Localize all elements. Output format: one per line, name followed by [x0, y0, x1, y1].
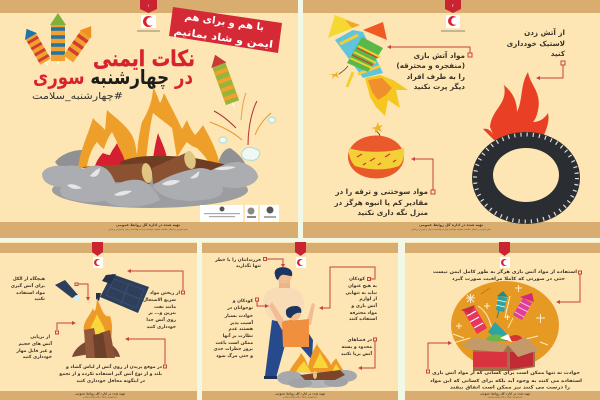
text: bomb: مقادیر کم یا انبوه هرگز در	[333, 198, 428, 207]
text: alcohol: برای آتش گیری	[11, 282, 45, 289]
footer	[75, 392, 125, 398]
panel 1: cover	[0, 0, 298, 238]
text: vulnerable: و حتی مرگ شود	[216, 352, 253, 359]
text: vulnerable: کودکان و	[232, 298, 253, 304]
text: clothes: در اینگونه محافل خودداری کنید	[76, 377, 146, 384]
flames	[78, 87, 220, 168]
text: fireworks use: نباید به تنهایی	[346, 291, 377, 296]
callout: closed spaces	[361, 338, 376, 368]
text: size: خودداری کنید	[23, 354, 52, 360]
footer	[411, 223, 491, 231]
text: alcohol: مواد استفاده	[16, 291, 45, 296]
text: accidents: حوادث نه تنها ممکن است برای کسانی که از مواد آتش بازی	[432, 370, 580, 376]
footer	[480, 392, 530, 398]
text: fireworks	[396, 50, 465, 91]
ribbon number: ۱	[147, 3, 150, 8]
icon: tire	[472, 132, 580, 224]
ribbon number	[295, 242, 306, 256]
stones	[42, 162, 258, 207]
logs	[82, 150, 228, 184]
text: closed spaces: در فضاهای	[348, 338, 373, 343]
text: tire warning: از آتش زدن	[524, 27, 565, 37]
text: vulnerable: هستند عدم	[228, 327, 253, 332]
icon: red crescent logo	[441, 15, 465, 32]
text: vulnerable: بروز خطرات جدی	[214, 347, 253, 352]
text: vulnerable	[214, 298, 253, 359]
banner: together: ایمن و شاد بمانیم	[173, 26, 274, 51]
text: fireworks use: از لوازم	[359, 297, 377, 302]
text: fuel: بنزین و... بر	[147, 311, 176, 316]
footer	[275, 392, 325, 398]
text: fireworks: ‏(منفجره و محترقه)‏	[396, 61, 465, 70]
text: alcohol: هیچگاه از الکل	[13, 275, 45, 282]
callout: vulnerable	[256, 298, 266, 306]
panel 3: fire and fuel	[0, 242, 197, 400]
ribbon number	[92, 242, 103, 256]
text: tire warning	[507, 27, 566, 58]
icon: rockets	[328, 15, 408, 116]
callout: fuel	[130, 271, 184, 294]
text: closed spaces: محدود و بسته	[341, 345, 372, 350]
text: fireworks use	[346, 276, 377, 322]
footer: دفتر آموزش و ارتقای سلامت معاونت بهداشت	[83, 396, 117, 398]
text: vulnerable: ممکن است باعث	[215, 340, 253, 346]
text: clothes: در موقع پریدن از روی آتش از لباس گشاد و	[65, 363, 163, 370]
text: never fully safe: استفاده از مواد آتش بازی هرگز به طور کامل ایمن نیست	[433, 268, 578, 275]
text: alcohol: نکنید	[34, 296, 45, 302]
footer: دفتر آموزش و ارتقای سلامت معاونت بهداشت وزارت بهداشت درمان و آموزش پزشکی	[108, 228, 188, 231]
icon: campfire	[72, 298, 120, 358]
icon: bottle	[55, 280, 80, 301]
firecracker: right	[208, 52, 242, 111]
text: size: و غیر قابل مهار	[15, 349, 52, 354]
stones base	[52, 172, 248, 208]
rockets	[461, 291, 534, 342]
text: fuel: روی آتش جدا	[146, 317, 176, 323]
text: bomb: مواد سوختنی و ترقه را در	[334, 187, 428, 196]
callout: tire	[539, 61, 565, 78]
callout: safety	[559, 271, 582, 302]
text: vulnerable: نظارت بر آنها	[223, 333, 253, 339]
text: size: از برپایی	[30, 335, 50, 340]
icon: red crescent logo	[296, 257, 306, 268]
sparks	[210, 93, 276, 160]
icon: flames on tire	[483, 72, 549, 140]
text: fuel: سریع الاشتعال	[143, 298, 177, 303]
text: fuel	[143, 291, 180, 330]
footer: تهیه شده در اداره کل روابط عمومی	[275, 392, 325, 396]
text: bomb: منزل نگه داری نکنید	[357, 208, 428, 217]
illustration: fireworks box	[451, 281, 559, 371]
text: size: آتش های حجیم	[18, 341, 52, 347]
callout: bomb	[414, 159, 435, 194]
icon: bomb	[348, 122, 404, 178]
text: vulnerable: آسیب پذیر	[229, 320, 253, 326]
text: fuel: مانند نفت	[154, 305, 176, 310]
box	[473, 345, 535, 371]
text: fuel: خودداری کنید	[147, 324, 176, 330]
panel 4: children	[202, 242, 398, 400]
footer: تهیه شده در اداره کل روابط عمومی	[480, 392, 530, 396]
footer: دفتر آموزش و ارتقای سلامت معاونت بهداشت	[283, 396, 317, 398]
hashtag: ‏#چهارشنبه_سلامت	[32, 91, 123, 102]
footer: دفتر آموزش و ارتقای سلامت معاونت بهداشت وزارت بهداشت درمان و آموزش پزشکی	[411, 228, 491, 231]
text: vulnerable: حوادث بسیار	[224, 314, 253, 319]
ribbon number: ۲	[452, 3, 454, 8]
text: fireworks use: آتش بازی و	[350, 303, 377, 309]
illustration: small fire and stones	[277, 344, 357, 388]
ribbon number	[445, 0, 461, 13]
stones back	[55, 148, 246, 168]
footer	[108, 223, 188, 231]
icon: red crescent logo	[137, 15, 160, 32]
text: vulnerable: نوجوانان در	[226, 306, 253, 311]
text: tire warning: لاستیک خودداری	[507, 39, 565, 48]
callout: clothes	[128, 339, 166, 368]
text: accidents	[430, 370, 583, 390]
text: fireworks: دیگر پرت نکنید	[414, 82, 465, 91]
text: fireworks use: استفاده کنند	[349, 316, 377, 322]
text: closed spaces: آتش برپا نکنید	[341, 351, 372, 357]
callout: fireworks use	[322, 267, 375, 308]
text: accidents: را درست می کنند نیز ممکن است اتفاق بیفتد	[450, 384, 570, 390]
sparkles	[453, 285, 548, 345]
banner: together: با هم و برای هم	[184, 12, 265, 34]
sponsor logos	[200, 205, 279, 222]
text: do not leave children: تنها نگذارید	[236, 262, 261, 269]
text: never fully safe: حتی در صورتی که کاملا مراقبت صورت گیرد	[452, 275, 565, 282]
text: fuel: از ریختن مواد	[150, 291, 180, 296]
callout: size	[56, 323, 73, 334]
text: clothes: بلند و از نوع آتش گیر استفاده نکرده و از تجمع	[59, 370, 162, 377]
callout: children alone	[264, 258, 283, 265]
firecracker: orange cap	[63, 22, 97, 63]
footer: تهیه شده در اداره کل روابط عمومی	[75, 392, 125, 396]
text: bomb	[333, 187, 428, 217]
text: clothes	[59, 363, 163, 384]
banner: together	[169, 7, 282, 53]
footer: تهیه شده در اداره کل روابط عمومی	[116, 223, 181, 227]
text: fireworks: را به طرف افراد	[406, 72, 465, 81]
title: نکات ایمنی	[93, 47, 195, 72]
firecracker: green cap	[50, 13, 66, 64]
panel 2: fireworks and tire	[303, 0, 600, 238]
text: closed spaces	[341, 338, 373, 357]
title	[33, 47, 195, 90]
panel 5: fireworks box	[405, 242, 600, 400]
title: در چهارشنبه سوری	[33, 65, 193, 90]
icon: red crescent logo	[500, 257, 510, 268]
callout: accidents	[426, 343, 449, 373]
ribbon number	[140, 0, 157, 13]
text: fireworks use: مواد محترقه	[350, 311, 377, 316]
text: never fully safe	[433, 268, 578, 282]
text: fireworks use: به هیچ عنوان	[348, 284, 377, 289]
firecracker: blue cap	[20, 25, 54, 70]
ribbon number	[499, 242, 510, 256]
text: accidents: استفاده می کنند به وجود آید بلکه برای کسانی که این مواد	[430, 378, 583, 384]
text: do not leave children	[214, 258, 261, 269]
text: do not leave children: فرزندانتان را با خطر	[214, 258, 261, 263]
callout: fireworks	[390, 47, 472, 57]
text: size	[15, 335, 52, 360]
illustration: father and son	[263, 266, 315, 379]
text: tire warning: کنید	[551, 49, 566, 58]
callout: alcohol	[75, 283, 88, 298]
footer: تهیه شده در اداره کل روابط عمومی	[419, 223, 484, 227]
text: alcohol	[11, 275, 45, 302]
text: fireworks: مواد آتش بازی	[413, 50, 465, 60]
footer: دفتر آموزش و ارتقای سلامت معاونت بهداشت	[488, 396, 522, 398]
icon: red crescent logo	[93, 257, 103, 268]
icon: jerrycan	[96, 274, 149, 313]
text: fireworks use: کودکان	[349, 276, 365, 282]
